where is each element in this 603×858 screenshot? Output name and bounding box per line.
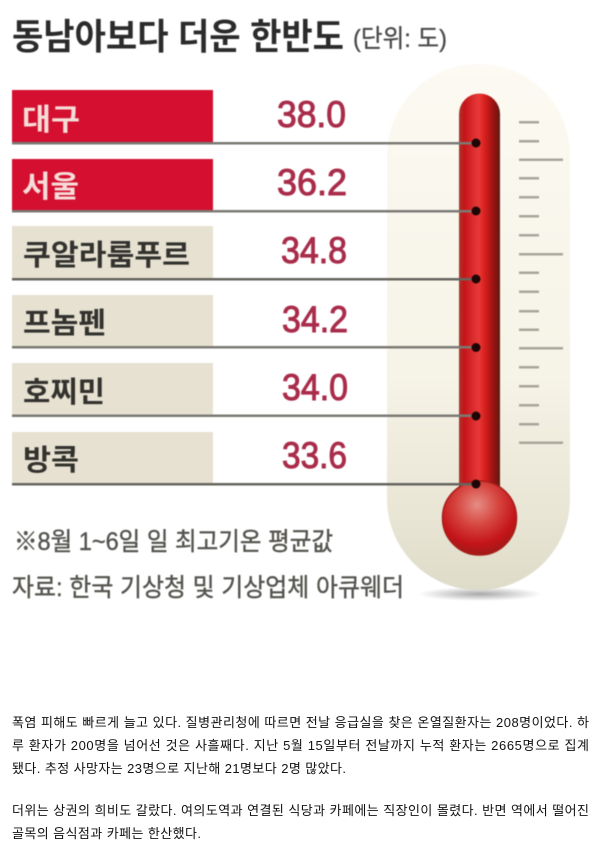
icon: thermometer — [387, 64, 570, 601]
bulb — [442, 481, 516, 555]
paragraph 1: 루 환자가 200명을 넘어선 것은 사흘째다. 지난 5월 15일부터 전날까지 누적 환자는 2665명으로 집계 — [12, 738, 589, 753]
row: 쿠알라룸푸르: 쿠알라룸푸르 — [23, 239, 190, 272]
row: 대구: 대구 — [22, 104, 80, 137]
source: 자료: 한국 기상청 및 기상업체 아큐웨더 — [12, 574, 404, 602]
row: 쿠알라룸푸르 — [12, 226, 476, 280]
footnote: ※8월 1~6일 일 최고기온 평균값 — [14, 528, 333, 556]
row: 서울: 36.2 — [277, 162, 347, 203]
row: 호찌민: 호찌민 — [23, 376, 105, 409]
row: 방콕: 방콕 — [23, 444, 79, 477]
thermometer shadow — [418, 587, 542, 601]
row: 서울: 서울 — [22, 171, 79, 204]
paragraph 1 — [12, 715, 589, 776]
row: 방콕: 33.6 — [282, 435, 347, 476]
row: 호찌민: 34.0 — [282, 367, 348, 408]
paragraph 2: 더위는 상권의 희비도 갈랐다. 여의도역과 연결된 식당과 카페에는 직장인이 몰렸다. 반면 역에서 떨어진 — [12, 803, 589, 818]
title: 동남아보다 더운 한반도 — [12, 16, 344, 57]
row: 호찌민 — [12, 363, 476, 417]
paragraph 1: 폭염 피해도 빠르게 늘고 있다. 질병관리청에 따르면 전날 응급실을 찾은 온열질환자는 208명이었다. 하 — [12, 715, 589, 730]
row: 대구: 38.0 — [277, 94, 346, 135]
scale ticks — [519, 121, 563, 444]
paragraph 2 — [12, 803, 589, 841]
red tube — [459, 94, 500, 500]
row: 프놈펜 — [12, 295, 476, 348]
infographic: temperatures — [11, 16, 570, 602]
paragraph 1: 됐다. 추정 사망자는 23명으로 지난해 21명보다 2명 많았다. — [12, 761, 346, 776]
thermometer body — [387, 64, 570, 590]
title: (단위: 도) — [353, 25, 447, 53]
temperature markers — [472, 138, 480, 488]
row: 대구 — [12, 90, 476, 144]
row: 프놈펜: 프놈펜 — [23, 307, 106, 340]
row: 쿠알라룸푸르: 34.8 — [281, 230, 347, 271]
row: 프놈펜: 34.2 — [282, 299, 348, 340]
paragraph 2: 골목의 음식점과 카페는 한산했다. — [12, 826, 201, 841]
row: 서울 — [12, 159, 476, 212]
row: 방콕 — [12, 432, 476, 486]
